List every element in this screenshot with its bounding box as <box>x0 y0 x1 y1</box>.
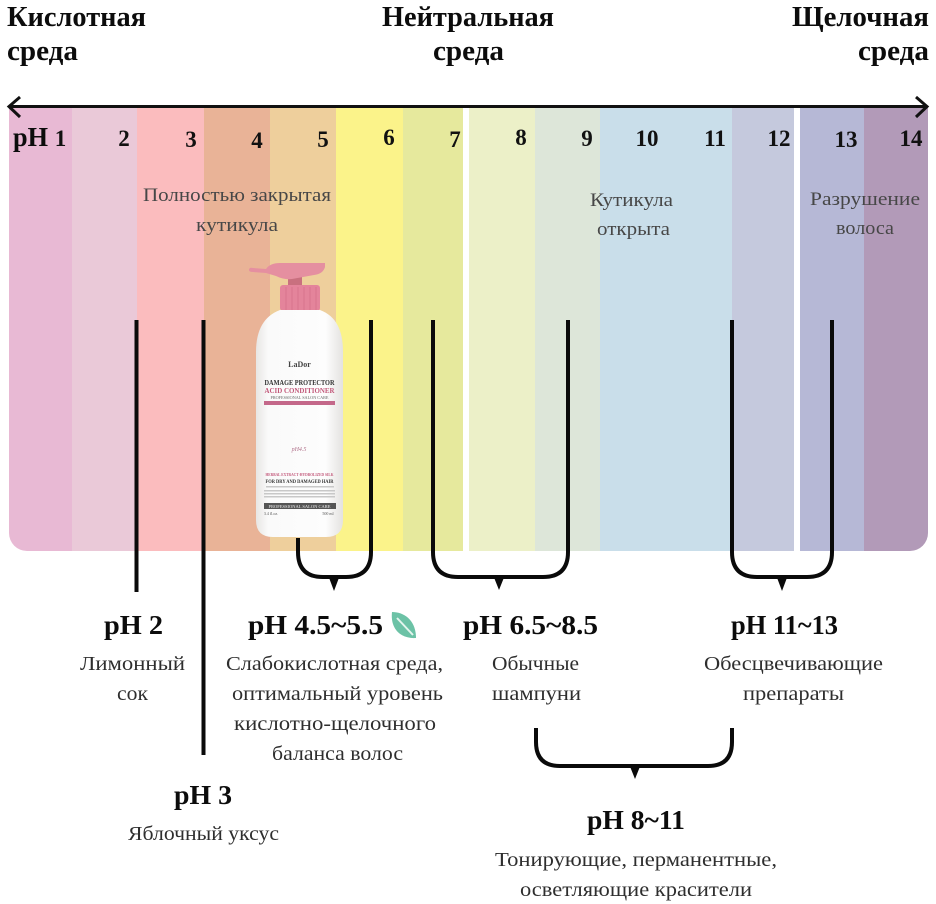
heading: acidic environment <box>7 2 146 67</box>
bottle neck <box>288 276 302 286</box>
pH scale numbers: 9 <box>581 126 593 151</box>
bottle brand label: PROFESSIONAL SALON CARE <box>270 395 329 400</box>
callout: pH 4.5-5.5 optimal balance: Слабокислотная среда, <box>226 653 443 675</box>
bottle brand label: 500 ml <box>322 511 334 516</box>
pH scale numbers: 13 <box>834 127 858 152</box>
pH scale numbers: 5 <box>317 127 329 152</box>
pH scale numbers: pH <box>13 122 48 152</box>
callout: pH 4.5-5.5 optimal balance: pH 4.5~5.5 <box>248 610 383 640</box>
bottle collar <box>280 285 320 311</box>
pH scale numbers <box>13 122 923 153</box>
callout: pH 8-11 dyes: осветляющие красители <box>520 879 752 901</box>
callout: pH 2 lemon juice <box>80 610 185 705</box>
bottle brand label: DAMAGE PROTECTOR <box>264 378 335 387</box>
heading: alkaline environment <box>792 2 929 67</box>
pH colour scale panel <box>9 107 928 551</box>
heading: neutral environment: Нейтральная <box>382 2 554 33</box>
bottle brand label: PROFESSIONAL SALON CARE <box>268 504 331 509</box>
pH scale numbers: 10 <box>636 126 658 151</box>
callout: pH 11-13 bleaching products: препараты <box>743 683 844 705</box>
label: fully closed cuticle: кутикула <box>196 215 279 236</box>
bottle brand label: FOR DRY AND DAMAGED HAIR <box>266 480 334 485</box>
icon: green leaf <box>392 612 416 638</box>
label: hair destruction: волоса <box>836 218 895 239</box>
callout: pH 4.5-5.5 optimal balance: оптимальный уровень <box>232 683 443 705</box>
bottle brand label: LaDor <box>288 360 311 369</box>
callout: pH 4.5-5.5 optimal balance: баланса волос <box>272 743 403 765</box>
pH scale numbers: 14 <box>900 126 923 151</box>
callout: pH 2 lemon juice: Лимонный <box>80 653 185 675</box>
callout: pH 4.5-5.5 optimal balance <box>226 610 443 765</box>
bracket: pH 4.5-5.5 <box>298 320 371 591</box>
label: cuticle open: Кутикула <box>590 190 674 211</box>
label: fully closed cuticle: Полностью закрытая <box>143 185 331 206</box>
bracket: pH 11-13 <box>732 320 832 591</box>
callout: pH 4.5-5.5 optimal balance: кислотно-щелочного <box>234 713 436 735</box>
callout: pH 6.5-8.5 regular shampoos: pH 6.5~8.5 <box>463 610 598 640</box>
callout: pH 11-13 bleaching products: Обесцвечивающие <box>704 653 883 675</box>
pH scale numbers: 11 <box>704 126 726 151</box>
pH scale numbers: 12 <box>768 126 790 151</box>
bottle brand label: HERBAL EXTRACT·HYDROLIZED SILK <box>266 472 334 477</box>
callout: pH 3 apple vinegar: Яблочный уксус <box>128 823 279 845</box>
pH scale numbers: 3 <box>185 127 197 152</box>
callout: pH 2 lemon juice: pH 2 <box>104 610 163 640</box>
label: cuticle open: открыта <box>597 219 671 240</box>
callout: pH 6.5-8.5 regular shampoos <box>463 610 598 705</box>
pH scale numbers: 1 <box>55 126 66 151</box>
label: hair destruction <box>810 189 920 239</box>
heading: alkaline environment: среда <box>858 36 929 67</box>
pH scale numbers: 2 <box>118 126 130 151</box>
heading: neutral environment: среда <box>433 36 504 67</box>
pH scale numbers: 8 <box>515 125 527 150</box>
callout: pH 8-11 dyes: pH 8~11 <box>587 805 685 835</box>
bottle brand label: ACID CONDITIONER <box>264 386 335 395</box>
callout: pH 8-11 dyes: Тонирующие, перманентные, <box>495 849 777 871</box>
arrow: pH axis <box>9 97 927 117</box>
bottle body <box>256 310 343 537</box>
bracket: pH 6.5-8.5 <box>433 320 568 590</box>
pH scale numbers: 4 <box>251 128 263 153</box>
callout: pH 11-13 bleaching products <box>704 610 883 705</box>
heading: acidic environment: Кислотная <box>7 2 146 33</box>
label: hair destruction: Разрушение <box>810 189 920 210</box>
callout: pH 2 lemon juice: сок <box>117 683 148 705</box>
product: conditioner bottle <box>249 263 343 537</box>
pH scale numbers: 7 <box>449 127 461 152</box>
callout: pH 11-13 bleaching products: pH 11~13 <box>731 610 838 640</box>
label: fully closed cuticle <box>143 185 331 236</box>
bottle brand label: pH4.5 <box>291 446 306 453</box>
bottle pump <box>249 263 325 279</box>
bracket: pH 8-11 <box>536 728 732 779</box>
bottle brand label <box>264 360 336 516</box>
callout: pH 3 apple vinegar <box>128 780 279 845</box>
callout: pH 3 apple vinegar: pH 3 <box>174 780 232 810</box>
marker line: pH 3 <box>202 320 206 755</box>
pH scale numbers: 6 <box>383 125 395 150</box>
heading: alkaline environment: Щелочная <box>792 2 929 33</box>
callout: pH 6.5-8.5 regular shampoos: Обычные <box>492 653 579 675</box>
bottle brand label: 3.4 fl.oz. <box>264 511 278 516</box>
heading: neutral environment <box>382 2 554 67</box>
marker line: pH 2 <box>134 320 138 592</box>
callout: pH 6.5-8.5 regular shampoos: шампуни <box>492 683 581 705</box>
label: cuticle open <box>590 190 674 240</box>
callout: pH 8-11 dyes <box>495 805 777 901</box>
heading: acidic environment: среда <box>7 36 78 67</box>
